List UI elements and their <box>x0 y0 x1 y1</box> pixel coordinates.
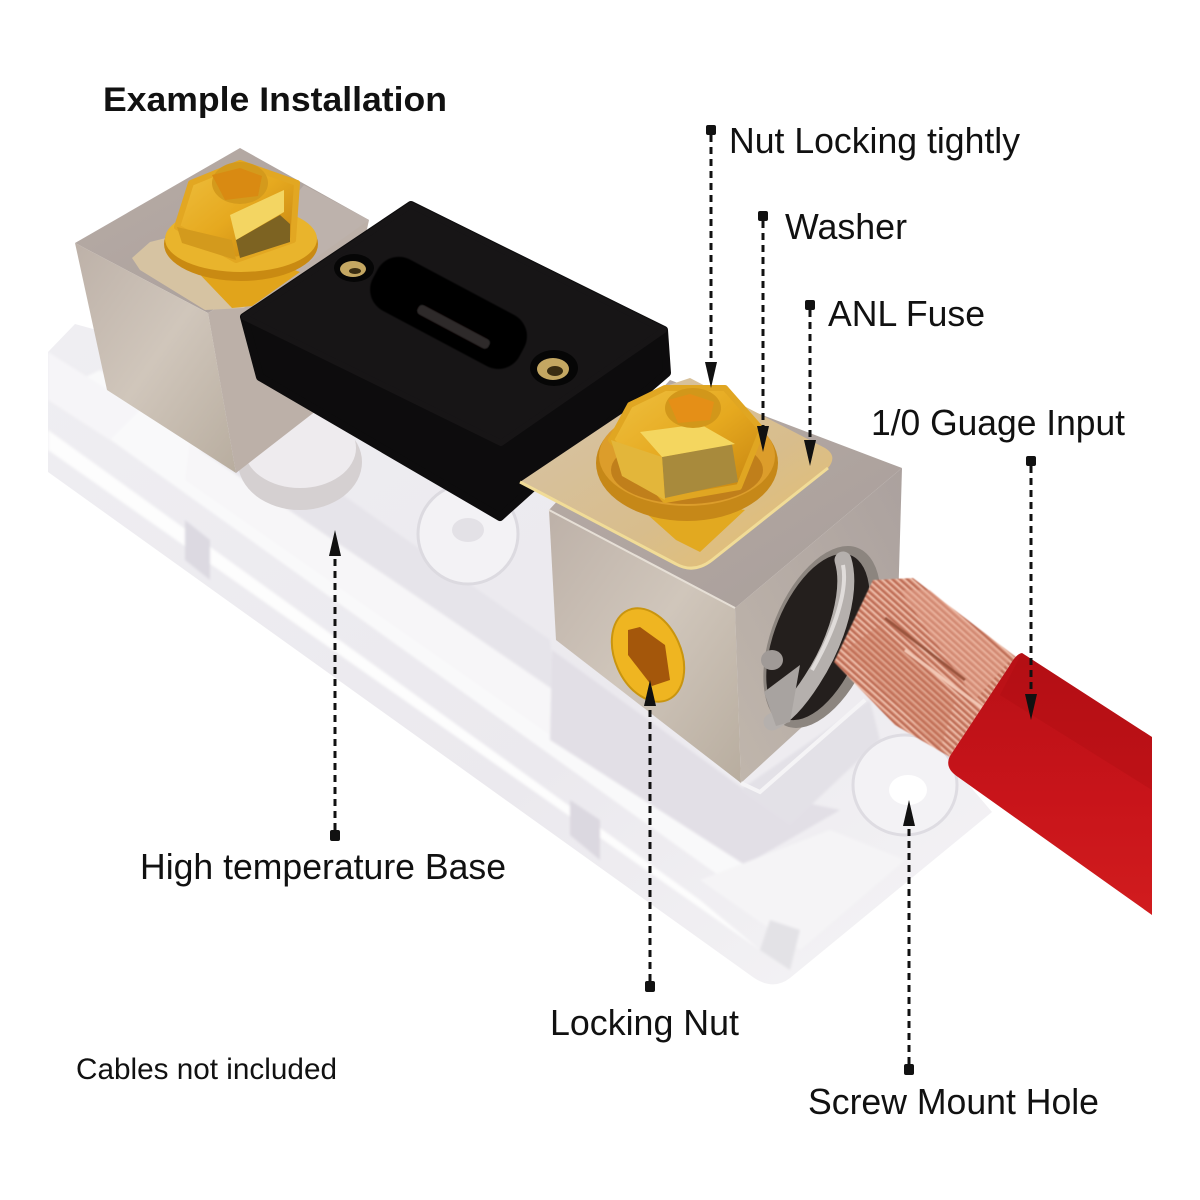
callout: washer: Washer <box>785 206 907 247</box>
right gold nut and washer <box>596 388 778 521</box>
red cable insulation <box>948 653 1152 915</box>
callout: locking nut <box>550 680 739 1043</box>
callout: screw mount hole: Screw Mount Hole <box>808 1081 1099 1122</box>
footnote: Cables not included <box>76 1053 337 1086</box>
clear plastic base <box>48 324 992 984</box>
callout: high temperature base <box>140 530 506 887</box>
callout: 1/0 gauge input: 1/0 Guage Input <box>871 402 1125 443</box>
mounting holes in base <box>238 408 957 835</box>
right gold plate <box>520 378 832 568</box>
callout: nut locking tightly: Nut Locking tightly <box>729 120 1020 161</box>
callout: locking nut: Locking Nut <box>550 1002 739 1043</box>
callout: screw mount hole <box>808 800 1099 1122</box>
left terminal block <box>75 148 369 473</box>
callout: 1/0 gauge input <box>871 402 1125 720</box>
callout: washer <box>757 206 907 452</box>
callout: ANL fuse: ANL Fuse <box>828 293 985 334</box>
infographic <box>48 86 1152 1114</box>
side locking screw <box>598 597 698 713</box>
black fuse cover <box>244 205 667 517</box>
right terminal block <box>549 380 902 792</box>
callout: high temperature base: High temperature Base <box>140 846 506 887</box>
cable entry hole <box>740 529 904 745</box>
left gold plate and nut <box>132 162 318 310</box>
title: Example Installation <box>103 81 447 119</box>
copper cable strands <box>834 578 1016 757</box>
callout: ANL fuse <box>804 293 985 466</box>
callout: nut locking tightly <box>705 120 1020 388</box>
